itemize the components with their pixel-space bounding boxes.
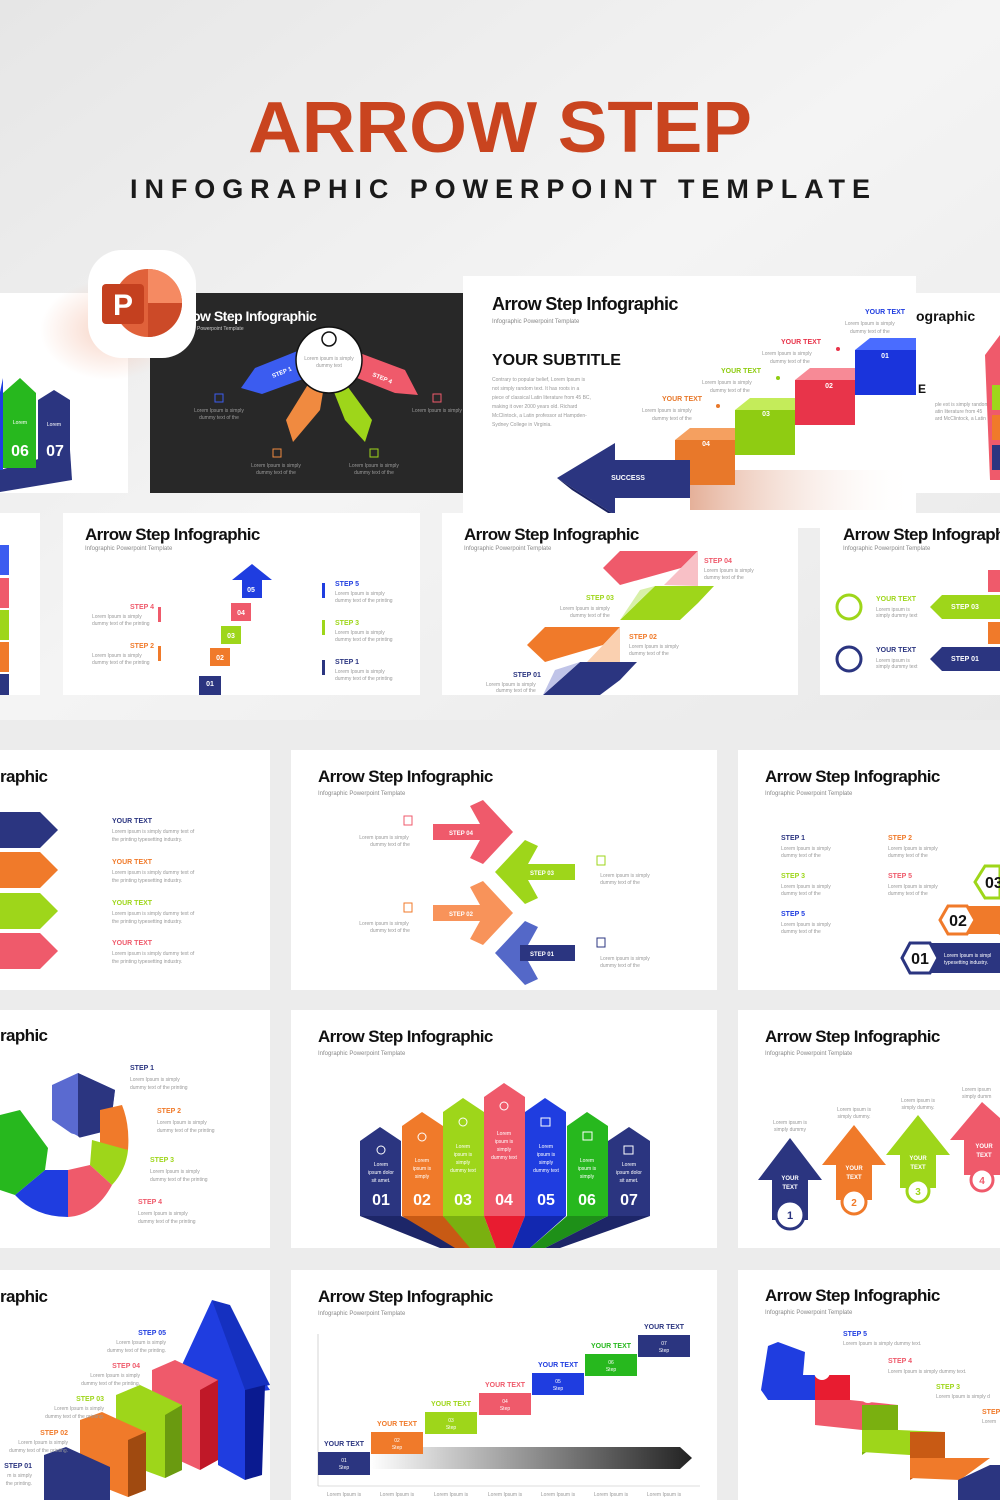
panel: row2 staircase slide: dummy text of the printing <box>335 637 393 643</box>
panel: row2 diamond slide: Lorem Ipsum is simply <box>560 606 610 612</box>
panel: row4 right up arrows: simply dummy. <box>902 1105 934 1111</box>
panel: row3 right hex steps: Lorem Ipsum is simply <box>781 846 831 852</box>
panel: row4 seven arrows: simply <box>497 1147 512 1153</box>
panel: row4 seven arrows: Infographic Powerpoint Template <box>318 1051 406 1057</box>
panel: row2 right slide: YOUR TEXT <box>876 596 917 603</box>
panel: row4 seven arrows: Lorem <box>374 1162 388 1168</box>
panel: row4 seven arrows: Lorem <box>580 1158 594 1164</box>
panel: row5 timeline staircase: 01 <box>341 1458 347 1464</box>
panel: row5 timeline staircase: Step <box>659 1348 669 1354</box>
panel: row2 staircase slide: STEP 1 <box>335 659 359 666</box>
panel: row5 left 3D boxes: STEP 01 <box>4 1463 32 1470</box>
panel: row4 seven arrows: 02 <box>413 1192 431 1209</box>
panel: row2 staircase slide: STEP 2 <box>130 643 154 650</box>
panel: row3 right hex steps: STEP 5 <box>888 873 912 880</box>
panel: row5 timeline staircase: Lorem Ipsum is <box>594 1492 629 1498</box>
panel: row5 timeline staircase: 06 <box>608 1360 614 1366</box>
panel: right partial slide row1: ard McClintock, a Latin <box>935 416 986 422</box>
panel: row2 diamond slide: Lorem Ipsum is simply <box>629 644 679 650</box>
panel: row4 right up arrows: YOUR <box>909 1156 927 1162</box>
panel: dark slide: ow Step Infographic <box>192 308 317 324</box>
panel: row3 left chevrons: Lorem ipsum is simply dummy text of <box>112 951 195 957</box>
panel: row4 seven arrows: simply <box>580 1174 595 1180</box>
panel: main big slide: Infographic Powerpoint Template <box>492 319 580 325</box>
panel: left partial slide row1 <box>0 280 180 493</box>
panel: main big slide: Arrow Step Infographic <box>492 294 678 314</box>
panel: row4 seven arrows: Lorem <box>539 1144 553 1150</box>
panel: row5 left 3D boxes: Lorem Ipsum is simply <box>90 1373 140 1379</box>
panel: main big slide: piece of classical Latin literature from 45 BC, <box>492 395 591 401</box>
panel: row3 right hex steps: Lorem Ipsum is simply <box>888 846 938 852</box>
panel: row4 seven arrows: ipsum dolor <box>368 1170 394 1176</box>
panel: row3 left chevrons: Lorem ipsum is simply dummy text of <box>112 911 195 917</box>
panel: row5 right zigzag steps: Lorem Ipsum is simply dummy text. <box>843 1341 921 1347</box>
panel: row3 right hex steps: 02 <box>949 913 967 930</box>
panel: main big slide: 03 <box>762 411 770 418</box>
panel: row3 left chevrons: YOUR TEXT <box>112 818 153 825</box>
panel: row4 right up arrows: Lorem ipsum is <box>773 1120 807 1126</box>
panel: row4 left ring: STEP 2 <box>157 1108 181 1115</box>
panel: main big slide: 01 <box>881 353 889 360</box>
panel: row3 center curved arrows: dummy text of the <box>600 963 640 969</box>
panel: row5 timeline staircase: 02 <box>394 1438 400 1444</box>
panel: row4 seven arrows: 01 <box>372 1192 390 1209</box>
panel: row3 left chevrons: YOUR TEXT <box>112 859 153 866</box>
panel: row5 right zigzag steps: Arrow Step Infographic <box>765 1286 940 1305</box>
panel: row4 seven arrows <box>291 1010 717 1248</box>
panel: dark slide: Lorem Ipsum is simply <box>251 463 301 469</box>
panel: row3 left chevrons: YOUR TEXT <box>112 900 153 907</box>
panel: row4 right up arrows: TEXT <box>910 1165 926 1171</box>
panel: row5 timeline staircase: YOUR TEXT <box>324 1441 365 1448</box>
panel: row2 staircase slide: 02 <box>216 655 224 662</box>
panel: row4 left ring <box>0 1010 270 1248</box>
panel: row2 staircase slide: Lorem Ipsum is simply <box>92 614 142 620</box>
panel: row4 right up arrows: simply dumm <box>962 1094 991 1100</box>
panel: row4 right up arrows: simply dummy. <box>838 1114 870 1120</box>
panel: row5 left 3D boxes: STEP 03 <box>76 1396 104 1403</box>
panel: row5 right zigzag steps: STEP <box>982 1409 1000 1416</box>
panel: row5 timeline staircase: YOUR TEXT <box>485 1382 526 1389</box>
panel: row4 seven arrows: ipsum is <box>537 1152 556 1158</box>
panel: row4 seven arrows: dummy text <box>491 1155 518 1161</box>
panel: main big slide: dummy text of the <box>652 416 692 422</box>
panel: row4 seven arrows: simply <box>415 1174 430 1180</box>
panel: row4 seven arrows: ipsum is <box>578 1166 597 1172</box>
panel: row5 timeline staircase: YOUR TEXT <box>377 1421 418 1428</box>
panel: row5 right zigzag steps: Lorem <box>982 1419 996 1425</box>
panel: main big slide <box>463 276 916 528</box>
panel: row4 seven arrows: Lorem <box>415 1158 429 1164</box>
panel: row4 seven arrows: simply <box>456 1160 471 1166</box>
panel: row4 right up arrows: Lorem ipsum is <box>837 1107 871 1113</box>
panel: row2 diamond slide: STEP 02 <box>629 634 657 641</box>
panel: row5 timeline staircase: 04 <box>502 1399 508 1405</box>
panel: main big slide: Contrary to popular belief, Lorem Ipsum is <box>492 377 586 383</box>
panel: row3 center curved arrows: dummy text of the <box>600 880 640 886</box>
panel: row4 left ring: STEP 1 <box>130 1065 154 1072</box>
subtitle: INFOGRAPHIC POWERPOINT TEMPLATE <box>130 174 870 204</box>
panel: row3 left chevrons: the printing typesetting industry. <box>112 837 182 843</box>
panel: row3 left chevrons: YOUR TEXT <box>112 940 153 947</box>
panel: row4 right up arrows: TEXT <box>976 1153 992 1159</box>
panel: row4 seven arrows: 07 <box>620 1192 638 1209</box>
panel: dark slide: Lorem Ipsum is simply <box>349 463 399 469</box>
panel: row4 seven arrows: ipsum is <box>454 1152 473 1158</box>
panel: row5 right zigzag steps: Lorem Ipsum is simply d <box>936 1394 990 1400</box>
panel: row2 slide far left <box>0 513 40 695</box>
panel: row4 seven arrows: 06 <box>578 1192 596 1209</box>
panel: row4 right up arrows: 4 <box>979 1176 985 1187</box>
panel: row4 right up arrows: TEXT <box>846 1175 862 1181</box>
panel: row3 right hex steps: STEP 1 <box>781 835 805 842</box>
panel: row2 staircase slide: dummy text of the printing <box>92 660 150 666</box>
panel: dark slide: STEP 4 <box>371 372 393 386</box>
panel: row4 left ring: Lorem Ipsum is simply <box>130 1077 180 1083</box>
panel: right partial slide row1: atin literature from 45 <box>935 409 982 415</box>
panel: row2 right slide: STEP 03 <box>951 604 979 611</box>
panel: row4 seven arrows: 04 <box>495 1192 513 1209</box>
panel: dark slide: dummy text of the <box>354 470 394 476</box>
panel: row4 right up arrows: Lorem ipsum is <box>901 1098 935 1104</box>
panel: main big slide: Lorem Ipsum is simply <box>762 351 812 357</box>
panel: main big slide: not simply random text. It has roots in a <box>492 386 579 392</box>
arrow: success <box>557 443 690 515</box>
panel: row3 center curved arrows: Arrow Step Infographic <box>318 767 493 786</box>
panel: row4 seven arrows: 03 <box>454 1192 472 1209</box>
panel: main big slide: making it over 2000 years old. Richard <box>492 404 578 410</box>
panel: row4 left ring: STEP 3 <box>150 1157 174 1164</box>
panel: row4 right up arrows: YOUR <box>845 1166 863 1172</box>
panel: row4 right up arrows: YOUR <box>781 1176 799 1182</box>
panel: row5 right zigzag steps <box>738 1270 1000 1500</box>
panel: row3 right hex steps: Arrow Step Infographic <box>765 767 940 786</box>
panel: row3 center curved arrows: dummy text of the <box>370 928 410 934</box>
panel: row3 center curved arrows: Lorem ipsum is simply <box>359 921 409 927</box>
panel: row5 timeline staircase: Lorem Ipsum is <box>327 1492 362 1498</box>
panel: row3 left chevrons: raphic <box>0 767 48 786</box>
panel: row5 timeline staircase: Lorem Ipsum is <box>488 1492 523 1498</box>
panel: row3 right hex steps: Lorem Ipsum is simply <box>781 922 831 928</box>
panel: row4 seven arrows: Lorem <box>456 1144 470 1150</box>
panel: row4 seven arrows: simply <box>539 1160 554 1166</box>
panel: row4 seven arrows: sit amet. <box>620 1178 638 1184</box>
panel: row5 timeline staircase: YOUR TEXT <box>431 1401 472 1408</box>
panel: row3 right hex steps: 01 <box>911 951 929 968</box>
panel: left partial slide row1: 07 <box>46 443 64 460</box>
panel: row3 left chevrons: Lorem ipsum is simply dummy text of <box>112 870 195 876</box>
panel: row2 right slide: Lorem ipsum is <box>876 607 910 613</box>
panel: row4 seven arrows: ipsum dolor <box>616 1170 642 1176</box>
panel: row2 staircase slide <box>63 513 420 695</box>
panel: row5 timeline staircase: YOUR TEXT <box>538 1362 579 1369</box>
panel: row3 center curved arrows: STEP 04 <box>449 831 474 837</box>
panel: row4 left ring: Lorem Ipsum is simply <box>157 1120 207 1126</box>
panel: row3 left chevrons: the printing typesetting industry. <box>112 878 182 884</box>
panel: row2 diamond slide: dummy text of the <box>704 575 744 581</box>
panel: row3 center curved arrows: Infographic Powerpoint Template <box>318 791 406 797</box>
panel: dark slide: STEP 1 <box>272 366 293 380</box>
panel: row5 left 3D boxes: STEP 04 <box>112 1363 140 1370</box>
panel: row4 seven arrows: Lorem <box>497 1131 511 1137</box>
panel: row4 left ring: Lorem Ipsum is simply <box>138 1211 188 1217</box>
panel: row3 left chevrons <box>0 750 270 990</box>
panel: row2 right slide: STEP 01 <box>951 656 979 663</box>
panel: row5 timeline staircase: Lorem Ipsum is <box>380 1492 415 1498</box>
panel: row3 left chevrons: Lorem ipsum is simply dummy text of <box>112 829 195 835</box>
panel: row2 staircase slide: Arrow Step Infographic <box>85 525 260 544</box>
panel: main big slide: Lorem Ipsum is simply <box>642 408 692 414</box>
panel: row3 right hex steps: typesetting industry. <box>944 960 988 966</box>
panel: row3 center curved arrows <box>291 750 717 990</box>
panel: row2 staircase slide: dummy text of the printing <box>335 676 393 682</box>
panel: right partial slide row1: ple ext is simply random <box>935 402 989 408</box>
background <box>0 0 1000 720</box>
panel: row2 staircase slide: 01 <box>206 681 214 688</box>
panel: row4 right up arrows: Infographic Powerpoint Template <box>765 1051 853 1057</box>
panel: row3 right hex steps: dummy text of the <box>781 853 821 859</box>
panel: row3 right hex steps: dummy text of the <box>781 929 821 935</box>
panel: row3 right hex steps: STEP 2 <box>888 835 912 842</box>
panel: row4 left ring: dummy text of the printing <box>138 1219 196 1225</box>
panel: row4 right up arrows: Arrow Step Infographic <box>765 1027 940 1046</box>
panel: row3 right hex steps: Lorem Ipsum is simply <box>781 884 831 890</box>
panel: row3 center curved arrows: dummy text of the <box>370 842 410 848</box>
panel: row5 right zigzag steps: STEP 5 <box>843 1331 867 1338</box>
panel: row2 staircase slide: Lorem Ipsum is simply <box>335 591 385 597</box>
panel: row4 seven arrows: sit amet. <box>372 1178 390 1184</box>
panel: left partial slide row1: 06 <box>11 443 29 460</box>
panel: row4 seven arrows: 05 <box>537 1192 555 1209</box>
panel: row4 left ring: STEP 4 <box>138 1199 162 1206</box>
panel: row5 right zigzag steps: Lorem Ipsum is simply dummy text. <box>888 1369 966 1375</box>
panel: row4 right up arrows: simply dummy <box>774 1127 806 1133</box>
panel: main big slide: dummy text of the <box>850 329 890 335</box>
panel: row5 timeline staircase: Arrow Step Infographic <box>318 1287 493 1306</box>
panel: row2 right slide: Infographic Powerpoint Template <box>843 546 931 552</box>
panel: row3 right hex steps <box>738 750 1000 990</box>
panel: row5 left 3D boxes: STEP 02 <box>40 1430 68 1437</box>
panel: row2 staircase slide: dummy text of the printing <box>92 621 150 627</box>
panel: row4 seven arrows: Arrow Step Infographic <box>318 1027 493 1046</box>
panel: row4 right up arrows: TEXT <box>782 1185 798 1191</box>
panel: main big slide: dummy text of the <box>710 388 750 394</box>
panel: row2 staircase slide: Lorem Ipsum is simply <box>335 669 385 675</box>
panel: row2 staircase slide: 05 <box>247 587 255 594</box>
panel: row2 staircase slide: dummy text of the printing <box>335 598 393 604</box>
panel: main big slide: YOUR TEXT <box>865 309 906 316</box>
panel: row5 timeline staircase: Step <box>446 1425 456 1431</box>
panel: row5 right zigzag steps: Infographic Powerpoint Template <box>765 1310 853 1316</box>
panel: row2 staircase slide: Lorem Ipsum is simply <box>335 630 385 636</box>
panel: row5 timeline staircase: Step <box>339 1465 349 1471</box>
panel: row2 diamond slide: Lorem Ipsum is simply <box>486 682 536 688</box>
panel: main big slide: YOUR TEXT <box>662 396 703 403</box>
panel: row5 timeline staircase: Lorem Ipsum is <box>541 1492 576 1498</box>
panel: row4 left ring: raphic <box>0 1026 48 1045</box>
panel: row4 left ring: dummy text of the printing <box>157 1128 215 1134</box>
panel: left partial slide row1: Lorem <box>47 422 61 428</box>
panel: row3 center curved arrows: Lorem ipsum is simply <box>600 873 650 879</box>
panel: row5 timeline staircase: 03 <box>448 1418 454 1424</box>
panel: row3 right hex steps: Lorem Ipsum is simply <box>888 884 938 890</box>
panel: right partial slide row1 <box>900 293 1000 493</box>
panel: row4 right up arrows <box>738 1010 1000 1248</box>
panel: row3 left chevrons: the printing typesetting industry. <box>112 919 182 925</box>
panel: row5 right zigzag steps: STEP 3 <box>936 1384 960 1391</box>
panel: row5 left 3D boxes <box>0 1270 270 1500</box>
panel: dark slide: ic Powerpoint Template <box>192 326 244 332</box>
panel: row5 timeline staircase <box>291 1270 717 1500</box>
panel: row5 right zigzag steps: STEP 4 <box>888 1358 912 1365</box>
panel: row2 staircase slide: STEP 5 <box>335 581 359 588</box>
panel: row3 left chevrons: the printing typesetting industry. <box>112 959 182 965</box>
panel: row4 seven arrows: dummy text <box>533 1168 560 1174</box>
panel: row3 right hex steps: dummy text of the <box>781 891 821 897</box>
panel: main big slide: SUCCESS <box>611 475 645 482</box>
title: ARROW STEP <box>248 88 752 168</box>
panel: dark slide <box>150 293 463 493</box>
panel: row2 diamond slide: dummy text of the <box>496 688 536 694</box>
panel: row3 right hex steps: dummy text of the <box>888 891 928 897</box>
icon: powerpoint: P <box>113 289 133 322</box>
panel: row2 diamond slide <box>442 513 798 695</box>
panel: row4 seven arrows: dummy text <box>450 1168 477 1174</box>
panel: main big slide: YOUR TEXT <box>721 368 762 375</box>
panel: main big slide: 02 <box>825 383 833 390</box>
panel: row3 center curved arrows: Lorem ipsum is simply <box>359 835 409 841</box>
panel: row4 seven arrows: ipsum is <box>413 1166 432 1172</box>
panel: row3 center curved arrows: STEP 03 <box>530 871 555 877</box>
panel: row4 left ring: dummy text of the printing <box>130 1085 188 1091</box>
panel: row5 timeline staircase: 05 <box>555 1379 561 1385</box>
panel: row2 right slide <box>820 513 1000 695</box>
panel: row4 right up arrows: 3 <box>915 1187 921 1198</box>
panel: right partial slide row1: ographic <box>916 308 975 324</box>
panel: dark slide: dummy text <box>316 363 343 369</box>
panel: row5 left 3D boxes: dummy text of the printing. <box>107 1348 166 1354</box>
panel: row5 left 3D boxes: Lorem Ipsum is simply <box>54 1406 104 1412</box>
panel: row2 diamond slide: Infographic Powerpoint Template <box>464 546 552 552</box>
panel: row2 right slide: simply dummy text <box>876 613 918 619</box>
panel: row4 right up arrows: 1 <box>787 1210 793 1222</box>
panel: row5 timeline staircase: 07 <box>661 1341 667 1347</box>
panel: row2 diamond slide: STEP 04 <box>704 558 732 565</box>
panel: row5 timeline staircase: YOUR TEXT <box>644 1324 685 1331</box>
panel: row2 right slide: YOUR TEXT <box>876 647 917 654</box>
panel: row3 right hex steps: STEP 5 <box>781 911 805 918</box>
panel: row5 timeline staircase: Step <box>392 1445 402 1451</box>
panel: row2 right slide: Lorem ipsum is <box>876 658 910 664</box>
panel: row2 staircase slide: 04 <box>237 610 245 617</box>
panel: row5 left 3D boxes: raphic <box>0 1287 48 1306</box>
panel: row3 right hex steps: Lorem Ipsum is simpl <box>944 953 991 959</box>
panel: row2 staircase slide: 03 <box>227 633 235 640</box>
panel: row4 right up arrows: 2 <box>851 1198 857 1209</box>
panel: row4 right up arrows: YOUR <box>975 1144 993 1150</box>
panel: row2 diamond slide: Arrow Step Infographic <box>464 525 639 544</box>
panel: row5 left 3D boxes: dummy text of the printing. <box>45 1414 104 1420</box>
panel: row2 staircase slide: Lorem Ipsum is simply <box>92 653 142 659</box>
panel: row3 right hex steps: dummy text of the <box>888 853 928 859</box>
panel: row2 diamond slide: STEP 03 <box>586 595 614 602</box>
panel: left partial slide row1: Lorem <box>13 420 27 426</box>
panel: row3 center curved arrows: STEP 01 <box>530 952 555 958</box>
panel: row2 right slide: simply dummy text <box>876 664 918 670</box>
panel: row4 seven arrows: Lorem <box>622 1162 636 1168</box>
panel: right partial slide row1: E <box>918 382 926 396</box>
panel: dark slide: dummy text of the <box>199 415 239 421</box>
panel: row2 staircase slide: Infographic Powerpoint Template <box>85 546 173 552</box>
panel: row3 center curved arrows: STEP 02 <box>449 912 474 918</box>
panel: dark slide: Lorem ipsum is simply <box>304 356 354 362</box>
panel: row5 timeline staircase: YOUR TEXT <box>591 1343 632 1350</box>
panel: main big slide: Lorem Ipsum is simply <box>845 321 895 327</box>
panel: row3 right hex steps: STEP 3 <box>781 873 805 880</box>
panel: dark slide: dummy text of the <box>256 470 296 476</box>
panel: row4 seven arrows: ipsum is <box>495 1139 514 1145</box>
panel: dark slide: Lorem Ipsum is simply <box>194 408 244 414</box>
panel: main big slide: dummy text of the <box>770 359 810 365</box>
panel: row5 left 3D boxes: dummy text of the printing. <box>81 1381 140 1387</box>
panel: main big slide: Sydney College in Virginia. <box>492 422 552 428</box>
panel: row4 right up arrows: Lorem ipsum <box>962 1087 991 1093</box>
panel: row3 right hex steps: Infographic Powerpoint Template <box>765 791 853 797</box>
panel: row5 left 3D boxes: the printing. <box>6 1481 32 1487</box>
panel: row2 diamond slide: Lorem Ipsum is simply <box>704 568 754 574</box>
panel: row2 staircase slide: STEP 4 <box>130 604 154 611</box>
panel: row4 left ring: Lorem Ipsum is simply <box>150 1169 200 1175</box>
icon: powerpoint <box>88 250 196 358</box>
panel: main big slide: YOUR TEXT <box>781 339 822 346</box>
panel: row2 diamond slide: dummy text of the <box>629 651 669 657</box>
panel: row2 staircase slide: STEP 3 <box>335 620 359 627</box>
panel: row5 left 3D boxes: Lorem Ipsum is simply <box>18 1440 68 1446</box>
panel: main big slide: McClintock, a Latin professor at Hampden- <box>492 413 587 419</box>
panel: row5 left 3D boxes: m is simply <box>7 1473 32 1479</box>
panel: row5 left 3D boxes: Lorem Ipsum is simply <box>116 1340 166 1346</box>
panel: main big slide: YOUR SUBTITLE <box>492 352 621 369</box>
panel: row5 timeline staircase: Step <box>606 1367 616 1373</box>
panel: row4 left ring: dummy text of the printing <box>150 1177 208 1183</box>
panel: row5 timeline staircase: Step <box>500 1406 510 1412</box>
cubes <box>690 470 916 510</box>
panel: row5 timeline staircase: Step <box>553 1386 563 1392</box>
panel: row5 left 3D boxes: STEP 05 <box>138 1330 166 1337</box>
panel: dark slide: Lorem Ipsum is simply <box>412 408 462 414</box>
panel: row3 center curved arrows: Lorem ipsum is simply <box>600 956 650 962</box>
panel: main big slide: Lorem Ipsum is simply <box>702 380 752 386</box>
panel: row5 timeline staircase: Lorem Ipsum is <box>647 1492 682 1498</box>
panel: main big slide: 04 <box>702 441 710 448</box>
panel: row5 timeline staircase: Infographic Powerpoint Template <box>318 1311 406 1317</box>
panel: row2 diamond slide: dummy text of the <box>570 613 610 619</box>
panel: row5 timeline staircase: Lorem Ipsum is <box>434 1492 469 1498</box>
panel: row5 left 3D boxes: dummy text of the printing. <box>9 1448 68 1454</box>
panel: row2 diamond slide: STEP 01 <box>513 672 541 679</box>
